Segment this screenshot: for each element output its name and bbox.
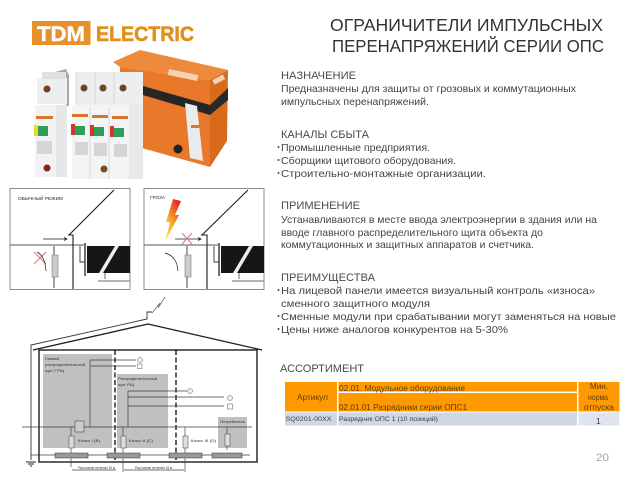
diagram: thunderstorm: ГРОЗА (150, 195, 166, 201)
assortment table: 02.01.01 Разрядники серии ОПС1 (339, 402, 467, 412)
text block: purpose: Предназначены для защиты от грозовых и коммутационных (281, 83, 577, 95)
text block: application: коммутационных и защитных аппаратов и счетчика. (281, 239, 534, 251)
title: ПЕРЕНАПРЯЖЕНИЙ СЕРИИ ОПС (332, 35, 604, 56)
text block: application: Устанавливаются в месте ввода электроэнергии в здания или на (281, 214, 597, 226)
text block: sales channels: Строительно-монтажные организации. (281, 168, 486, 180)
diagram labels: Расстояние не менее 15 м (78, 466, 115, 470)
text block: application (281, 200, 597, 251)
text block: purpose (281, 70, 577, 108)
text block: advantages: сменного защитного модуля (281, 298, 430, 310)
assortment table: 02.01. Модульное оборудование (339, 383, 465, 393)
diagram labels (45, 357, 245, 470)
assortment table: SQ0201-00XX (286, 416, 332, 423)
roof and walls (26, 297, 262, 466)
diagram labels: Потребитель (220, 420, 245, 424)
three-pole module (71, 72, 143, 179)
product box (113, 50, 228, 167)
assortment table: Артикул (297, 392, 328, 402)
diagram labels: Расстояние не менее 15 м (135, 466, 172, 470)
diagram labels: Распределительный (118, 377, 157, 381)
text block: sales channels: Сборщики щитового оборудования. (281, 155, 456, 167)
surge arresters (69, 434, 230, 448)
text block: purpose: НАЗНАЧЕНИЕ (281, 70, 356, 82)
text block: sales channels: КАНАЛЫ СБЫТА (281, 129, 370, 141)
logo: TDM Electric (32, 21, 194, 46)
text block: advantages: На лицевой панели имеется визуальный контроль «износа» (281, 285, 595, 297)
heading: assortment: АССОРТИМЕНТ (280, 363, 364, 375)
assortment table (285, 381, 620, 426)
title: ОГРАНИЧИТЕЛИ ИМПУЛЬСНЫХ (330, 15, 603, 35)
diagram labels: щит РЩ (118, 383, 134, 387)
equipotential bars (55, 453, 242, 458)
diagram labels: Класс III (D) (191, 439, 217, 443)
text block: purpose: импульсных перенапряжений. (281, 96, 429, 108)
diagram labels: Класс I (B) (78, 439, 101, 443)
text block: sales channels: Промышленные предприятия. (281, 142, 430, 154)
text block: advantages: ПРЕИМУЩЕСТВА (281, 272, 376, 284)
assortment table: отпуска (584, 402, 614, 412)
text block: advantages: Цены ниже аналогов конкурентов на 5-30% (281, 324, 508, 336)
wiring (22, 360, 252, 472)
diagram labels: щит ГРЩ (45, 369, 65, 373)
text block: application: ПРИМЕНЕНИЕ (281, 200, 360, 212)
diagram: normal mode: ОБЫЧНЫЙ РЕЖИМ (18, 194, 63, 202)
diagram: normal mode (10, 188, 130, 290)
red cross (182, 233, 192, 244)
diagram labels: Главный (45, 357, 59, 361)
product photo: surge arresters and box (34, 50, 228, 179)
assortment table: норма (588, 392, 608, 402)
assortment table: Разрядник ОПС 1 (10 позиций) (339, 415, 438, 423)
text block: sales channels (278, 129, 486, 180)
assortment table: 1 (596, 416, 601, 426)
single-pole module (34, 69, 69, 177)
text block: advantages (278, 272, 616, 336)
red cross (34, 252, 46, 264)
text block: application: вводе главного распределительного щита объекта до (281, 227, 543, 239)
diagram: building protection zones (22, 297, 262, 472)
logo: TDM Electric: ELECTRIC (96, 23, 194, 46)
diagram: thunderstorm (144, 188, 264, 290)
title (330, 15, 604, 56)
page number: 20 (596, 452, 609, 464)
diagram labels: распределительный (45, 363, 85, 367)
lightning bolt (165, 199, 181, 242)
assortment table: Мин. (590, 381, 608, 391)
gray distribution panels (43, 354, 247, 448)
diagram labels: Класс II (C) (129, 439, 154, 443)
text block: advantages: Сменные модули при срабатывании могут заменяться на новые (281, 311, 616, 323)
logo: TDM Electric: TDM (37, 23, 85, 46)
